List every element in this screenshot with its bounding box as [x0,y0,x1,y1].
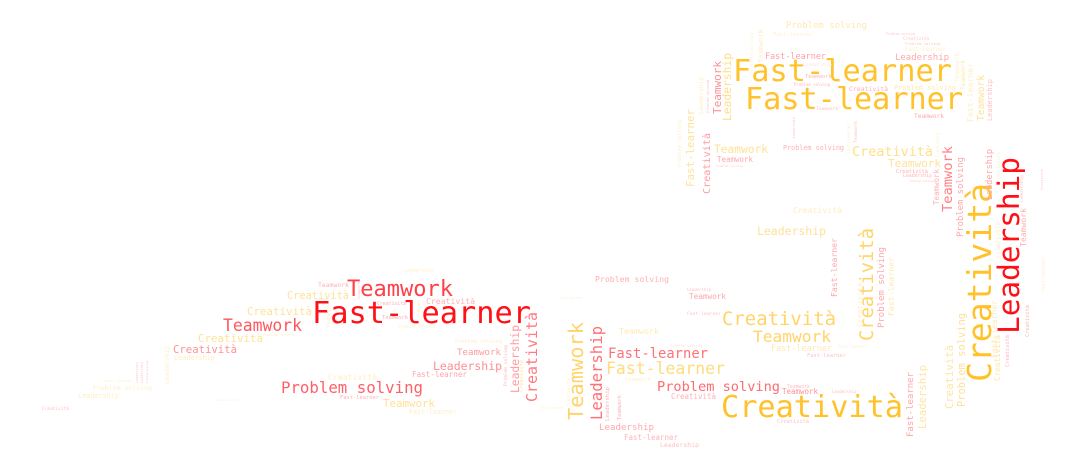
tiny words: top right cluster: Teamwork [805,74,833,80]
words: left cluster: Leadership [404,268,433,274]
words: left cluster: Problem solving [145,361,149,383]
words: left cluster: Teamwork [326,302,332,328]
words: left cluster: Creatività [426,296,475,306]
word: Leadership red vertical: Leadership [992,157,1026,334]
medium words: top right cluster: Leadership [757,224,826,238]
words: left cluster: Leadership [140,362,144,383]
words: centre and right cluster: Creatività [944,345,956,409]
vertical words: top right cluster: Fast-learner [965,63,975,122]
words: left cluster: Leadership [135,362,139,383]
vertical words: top right cluster: Problem solving [706,80,710,113]
words: centre and right cluster: Creatività [565,379,572,407]
medium words: top right cluster: Teamwork [888,157,941,170]
vertical words: top right cluster: Creatività [995,152,1002,180]
words: left cluster [42,268,525,416]
tiny words: top right cluster: Fast-learner [905,47,947,53]
words: centre and right cluster: Fast-learner [906,371,916,437]
words: left cluster: Leadership [509,325,522,393]
words: centre and right cluster: Problem solving [956,313,968,407]
tiny words: top right cluster: Creatività [903,35,929,42]
words: centre and right cluster: Fast-learner [560,296,583,300]
words: left cluster: Creatività [247,305,312,318]
words: centre and right cluster: Teamwork [617,394,623,420]
word: Fast-learner gold 1: Fast-learner [733,54,952,89]
word: Creatività vertical amber: Creatività [857,228,878,341]
words: centre and right cluster: Fast-learner [886,257,896,316]
vertical words: top right cluster: Leadership [698,77,705,114]
words: left cluster: Fast-learner [340,395,380,401]
vertical words: top right cluster: Teamwork [954,53,961,82]
words: centre and right cluster: Leadership [660,441,699,449]
vertical words: top right cluster: Problem solving [677,120,683,167]
words: centre and right cluster: Fast-learner [838,344,868,349]
words: centre and right cluster: Leadership [605,386,611,421]
words: centre and right cluster: Teamwork [782,387,818,396]
words: centre and right cluster: Creatività [855,283,864,327]
medium words: top right cluster: Creatività [852,144,933,160]
words: left cluster: Creatività [173,344,237,356]
vertical words: top right cluster: Creatività [935,132,940,157]
words: centre and right cluster: Fast-learner [829,238,839,297]
vertical words: top right cluster: Fast-learner [846,123,852,154]
vertical words: top right cluster: Leadership [1019,175,1025,202]
word: Problem solving coral right: Problem solving [657,379,780,395]
vertical words: top right cluster: Teamwork [757,28,765,63]
medium words: top right cluster: Teamwork [714,143,768,156]
words: left cluster: Leadership [164,346,171,384]
words: centre and right cluster: Leadership [916,365,929,429]
words: centre and right cluster: Teamwork [1019,208,1028,247]
vertical words: top right cluster: Leadership [985,149,995,200]
words: centre and right cluster: Creatività [1024,305,1031,337]
words: centre and right cluster: Leadership [599,423,654,433]
words: left cluster: Fast-learner [104,378,133,383]
tiny words: top right cluster: Leadership [903,173,932,179]
words: left cluster: Creatività [328,372,377,382]
word: Teamwork coral: Teamwork [223,316,302,335]
words: centre and right cluster: Leadership [832,389,857,394]
words: left cluster: Teamwork [417,299,421,317]
medium words: top right cluster: Fast-learner [765,51,826,61]
words: left cluster: Problem solving [214,398,241,402]
vertical words: top right cluster: Teamwork [932,169,941,205]
words: left cluster: Problem solving [93,384,152,392]
vertical words: top right cluster: Teamwork [960,60,967,90]
words: left cluster: Problem solving [455,339,502,345]
tiny words: top right cluster [716,32,947,183]
words: centre and right cluster: Creatività [995,222,1002,258]
words: left cluster: Problem solving [263,333,295,337]
word: Fast-learner gold 2: Fast-learner [745,82,963,117]
words: centre and right cluster: Creatività [671,392,716,401]
words: centre and right cluster: Creatività [993,335,1002,381]
words: left cluster: Fast-learner [409,408,457,416]
vertical words: top right cluster [677,28,1044,237]
vertical words: top right cluster: Leadership [986,79,994,121]
vertical words: top right cluster: Teamwork [711,61,724,114]
medium words: top right cluster: Teamwork [717,155,753,164]
words: centre and right cluster: Problem solving [877,247,887,328]
medium words: top right cluster: Creatività [849,85,888,93]
word: Problem solving coral left: Problem solving [281,378,423,397]
word: Teamwork gold vertical: Teamwork [564,322,588,420]
words: centre and right cluster: Teamwork [625,377,652,383]
words: left cluster: Creatività [518,360,525,392]
words: left cluster: Leadership [433,359,502,373]
vertical words: top right cluster: Problem solving [956,157,966,237]
vertical words: top right cluster: Teamwork [976,75,987,121]
vertical words: top right cluster: Creatività [1040,169,1044,190]
word: Teamwork red: Teamwork [347,277,453,302]
vertical words: top right cluster: Leadership [792,117,796,138]
words: left cluster: Fast-learner [412,370,467,379]
tiny words: top right cluster: Fast-learner [773,32,814,38]
tiny words: top right cluster: Problem solving [794,82,831,87]
medium words: top right cluster: Teamwork [914,113,944,120]
words: centre and right cluster: Teamwork [689,292,726,301]
medium words: top right cluster [714,21,956,238]
word: Fast-learner amber: Fast-learner [606,359,725,378]
words: left cluster: Creatività [42,405,69,412]
word: Fast-learner coral: Fast-learner [608,346,708,362]
words: centre and right cluster: Fast-learner [990,300,999,358]
vertical words: top right cluster: Teamwork [853,121,859,143]
word: Teamwork amber: Teamwork [753,327,831,346]
word: Creatività amber horizontal: Creatività [722,308,836,330]
medium words: top right cluster: Problem solving [894,84,956,92]
words: centre and right cluster: Problem solving [595,274,669,284]
tiny words: top right cluster: Teamwork [816,106,838,112]
words: left cluster: Problem solving [503,345,509,386]
vertical words: top right cluster: Fast-learner [684,109,697,187]
words: centre and right cluster: Fast-learner [771,343,832,353]
word: Creatività gold horizontal: Creatività [721,390,903,425]
words: centre and right cluster: Teamwork [619,326,659,336]
medium words: top right cluster: Creatività [793,205,842,215]
words: centre and right cluster: Leadership [687,287,712,292]
tiny words: top right cluster: Problem solving [910,179,934,183]
words: left cluster: Teamwork [383,397,435,410]
tiny words: top right cluster: Leadership [803,62,832,68]
words: centre and right cluster: Creatività [777,418,809,425]
words: centre and right cluster: Fast-learner [1041,257,1047,292]
words: centre and right cluster: Teamwork [787,384,810,390]
tiny words: top right cluster: Problem solving [716,164,743,168]
medium words: top right cluster: Leadership [895,53,949,63]
words: left cluster: Creatività [287,290,349,302]
words: left cluster: Teamwork [356,281,361,300]
medium words: top right cluster: Problem solving [783,144,844,152]
words: left cluster: Leadership [174,354,215,362]
words: centre and right cluster [540,208,1047,449]
vertical words: top right cluster: Problem solving [749,33,755,73]
word: Teamwork coral vertical right: Teamwork [940,145,956,212]
words: left cluster: Creatività [198,332,263,345]
words: centre and right cluster: Problem solving [670,344,702,348]
words: left cluster: Leadership [78,392,119,400]
words: centre and right cluster: Fast-learner [540,406,565,410]
tiny words: top right cluster: Problem solving [905,41,940,46]
tiny words: top right cluster: Problem solving [886,32,915,36]
vertical words: top right cluster: Creatività [701,133,713,194]
word: Fast-learner red: Fast-learner [312,296,531,331]
medium words: top right cluster: Problem solving [786,21,867,31]
words: left cluster: Teamwork [457,347,501,358]
words: centre and right cluster: Fast-learner [687,311,721,317]
words: centre and right cluster: Fast-learner [807,353,847,359]
word: Creatività coral vertical: Creatività [523,312,541,402]
word: Leadership coral vertical: Leadership [588,326,606,420]
words: left cluster: Teamwork [318,281,349,289]
tiny words: top right cluster: Creatività [896,168,928,175]
words: left cluster: Teamwork [382,315,409,321]
words: centre and right cluster: Creatività [1004,335,1011,367]
words: left cluster: Problem solving [398,324,436,329]
vertical words: top right cluster: Leadership [721,53,734,121]
words: centre and right cluster: Fast-learner [624,433,678,442]
words: left cluster: Creatività [377,300,406,307]
word: Creatività gold vertical: Creatività [960,183,999,382]
